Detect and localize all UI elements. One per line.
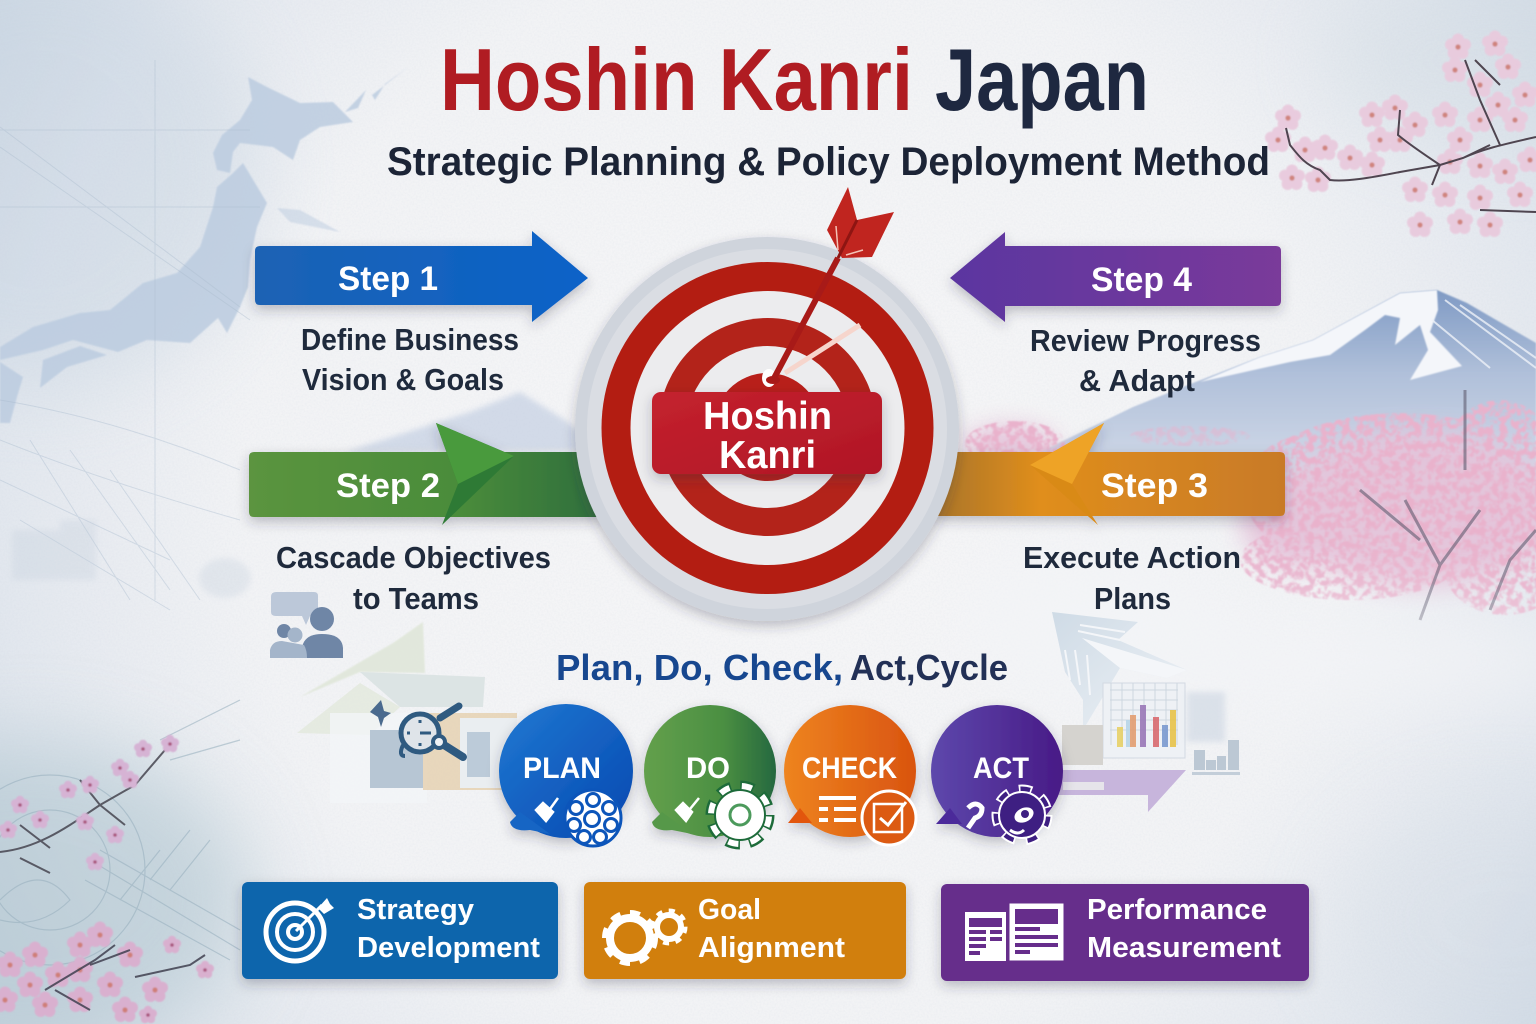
step 2 arrow	[249, 423, 600, 525]
map lines top left	[0, 60, 260, 610]
step 3 arrow: Step 3	[1101, 467, 1208, 505]
center label: Hoshin	[703, 395, 832, 438]
step 4 arrow	[950, 232, 1281, 322]
icon: team chat	[270, 592, 343, 658]
icon: do gear	[712, 787, 768, 843]
japan map silhouette	[0, 68, 407, 423]
icon: gears	[605, 911, 685, 963]
step 3 text	[1023, 540, 1241, 616]
icon: clock magnifier	[401, 706, 463, 757]
card: strategy development: Development	[357, 932, 540, 964]
cherry branch bottom left lower	[0, 922, 214, 1023]
act bubble: ACT	[973, 752, 1029, 785]
step 4 text: Review Progress	[1030, 323, 1261, 358]
act bubble	[931, 705, 1063, 837]
card: performance measurement: Measurement	[1087, 932, 1281, 964]
step 1 text: Vision & Goals	[302, 362, 504, 397]
icon: check circle	[862, 791, 916, 845]
step 2 text	[276, 540, 551, 616]
mount fuji	[1040, 290, 1536, 520]
card: strategy development	[242, 882, 558, 979]
icon: documents	[965, 903, 1064, 961]
card: performance measurement	[941, 884, 1309, 981]
icon: target	[266, 898, 334, 961]
cherry branch bottom left upper	[0, 735, 179, 873]
fog bands	[970, 560, 1536, 695]
center label	[652, 392, 882, 477]
check bubble	[784, 705, 916, 837]
illustration: paper plane and planning	[297, 622, 517, 803]
center label: Kanri	[719, 434, 816, 477]
step 2 text: Cascade Objectives	[276, 540, 551, 575]
map lines bottom left	[0, 700, 240, 965]
card: strategy development: Strategy	[357, 894, 474, 926]
step 4 text: & Adapt	[1079, 363, 1195, 398]
icon: plan flower	[565, 790, 621, 846]
step 3 text: Execute Action	[1023, 540, 1241, 575]
do bubble	[644, 705, 776, 837]
card: goal alignment: Goal	[698, 894, 761, 926]
illustration: paper arrow and charts	[1052, 612, 1240, 812]
cycle heading: Plan, Do, Check,	[556, 647, 843, 688]
step 4 text	[1030, 323, 1261, 398]
card: goal alignment	[584, 882, 906, 979]
cycle heading	[556, 647, 1008, 688]
icon: wrench	[968, 804, 982, 828]
icon: brush	[536, 798, 558, 821]
title: Hoshin Kanri	[440, 30, 913, 129]
step 1 text: Define Business	[301, 322, 519, 357]
cherry tree mass right	[962, 390, 1536, 620]
card: performance measurement: Performance	[1087, 894, 1267, 926]
check bubble: CHECK	[802, 752, 897, 785]
faint city left	[12, 520, 251, 598]
cycle heading: Act,Cycle	[850, 647, 1008, 688]
step 2 arrow: Step 2	[336, 467, 440, 505]
card: goal alignment: Alignment	[698, 932, 845, 964]
plan bubble: PLAN	[523, 752, 601, 785]
step 1 arrow: Step 1	[338, 260, 438, 298]
arrow in target	[762, 187, 894, 387]
step 3 text: Plans	[1094, 581, 1171, 616]
distant mountain left	[345, 392, 600, 452]
step 1 arrow	[255, 231, 588, 322]
icon: checklist	[819, 798, 856, 820]
do bubble: DO	[686, 752, 730, 785]
icon: act gear	[998, 791, 1046, 839]
step 1 text	[301, 322, 519, 397]
step 4 arrow: Step 4	[1091, 261, 1192, 299]
step 2 text: to Teams	[353, 581, 479, 616]
target	[575, 237, 959, 621]
title: Japan	[935, 30, 1149, 129]
subtitle: Strategic Planning & Policy Deployment Method	[387, 140, 1270, 184]
icon: tool	[676, 798, 699, 821]
plan bubble	[499, 704, 633, 838]
cherry branch top right	[1265, 30, 1536, 237]
step 3 arrow	[935, 423, 1285, 525]
